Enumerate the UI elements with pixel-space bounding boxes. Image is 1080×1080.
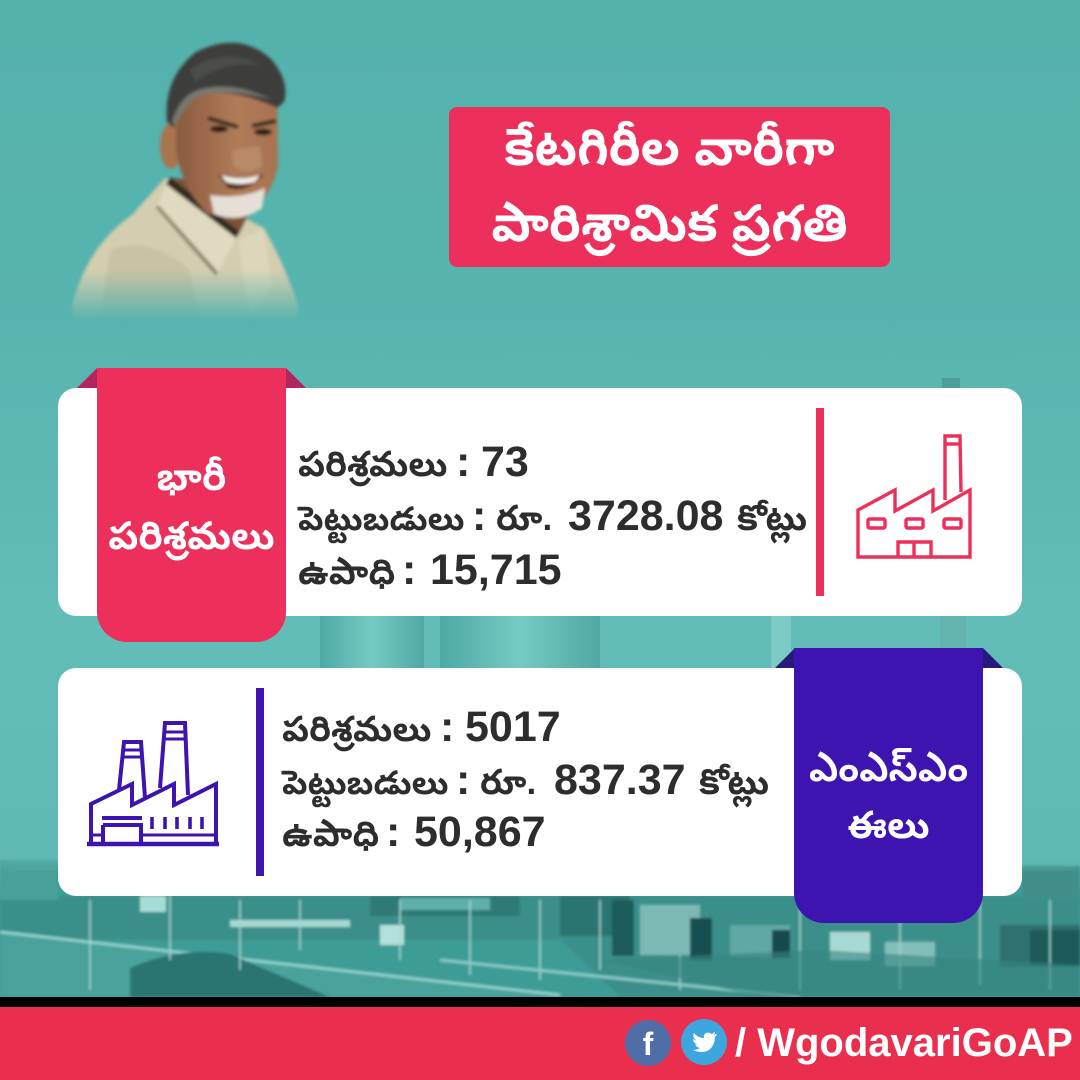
stat: industries: :: [456, 438, 470, 486]
card background: [58, 668, 1022, 896]
ribbon fold: left: [77, 368, 97, 388]
title box: పారిశ్రామిక ప్రగతి: [491, 195, 848, 252]
stat: investment: పెట్టుబడులు: [282, 764, 449, 801]
stat: industries: [282, 703, 561, 752]
stat: employment: [282, 808, 546, 856]
icon: facebook: [625, 1020, 671, 1066]
stat: investment: :: [472, 492, 486, 540]
stat: investment: పెట్టుబడులు: [298, 500, 465, 537]
stat: employment: :: [386, 808, 400, 856]
stat: investment: :: [456, 756, 470, 804]
ribbon label: MSMEs: ఎంఎస్ఎం: [809, 748, 968, 790]
stat: industries: 5017: [465, 703, 561, 751]
card background: [58, 388, 1022, 616]
stat: investment: [298, 492, 807, 544]
stat: industries: పరిశ్రమలు: [298, 445, 448, 484]
ribbon label: heavy industries: [97, 368, 286, 642]
stat: employment: [298, 546, 562, 594]
icon: factory with two chimneys: [87, 721, 219, 846]
footer bar: [0, 997, 1080, 1080]
stat: investment: [282, 756, 769, 808]
icon: twitter: [681, 1019, 727, 1065]
ribbon label: MSMEs: ఈలు: [847, 805, 930, 847]
ribbon fold: right: [983, 648, 1003, 668]
stat: investment: 3728.08: [568, 492, 723, 540]
stat: industries: [298, 438, 529, 486]
title box: [449, 107, 890, 267]
icon: factory with one chimney: [856, 434, 972, 559]
stat: employment: :: [402, 546, 416, 594]
stat: industries: :: [440, 703, 454, 751]
icon: facebook: f: [643, 1026, 653, 1062]
panel: MSME: [58, 648, 1022, 923]
divider: [816, 408, 824, 596]
stat: investment: కోట్లు: [737, 499, 807, 538]
stat: investment: 837.37: [554, 756, 686, 804]
stat: industries: పరిశ్రమలు: [282, 710, 432, 749]
ribbon label: MSMEs: [794, 648, 983, 923]
stat: employment: ఉపాధి: [298, 553, 395, 592]
panel: large industries: [58, 368, 1022, 642]
portrait photo: [71, 40, 299, 318]
handle text: / WgodavariGoAP: [735, 1021, 1073, 1065]
stat: employment: 15,715: [430, 546, 562, 594]
stat: investment: రూ.: [480, 763, 536, 802]
stat: investment: రూ.: [496, 499, 552, 538]
ribbon fold: right: [286, 368, 306, 388]
stat: employment: 50,867: [414, 808, 546, 856]
stat: industries: 73: [481, 438, 529, 486]
stat: employment: ఉపాధి: [282, 815, 379, 854]
ribbon label: heavy industries: పరిశ్రమలు: [108, 515, 275, 558]
ribbon label: heavy industries: భారీ: [157, 456, 226, 499]
title box: కేటగిరీల వారీగా: [504, 119, 835, 176]
divider: [256, 688, 264, 876]
ribbon fold: left: [775, 649, 794, 668]
stat: investment: కోట్లు: [699, 763, 769, 802]
